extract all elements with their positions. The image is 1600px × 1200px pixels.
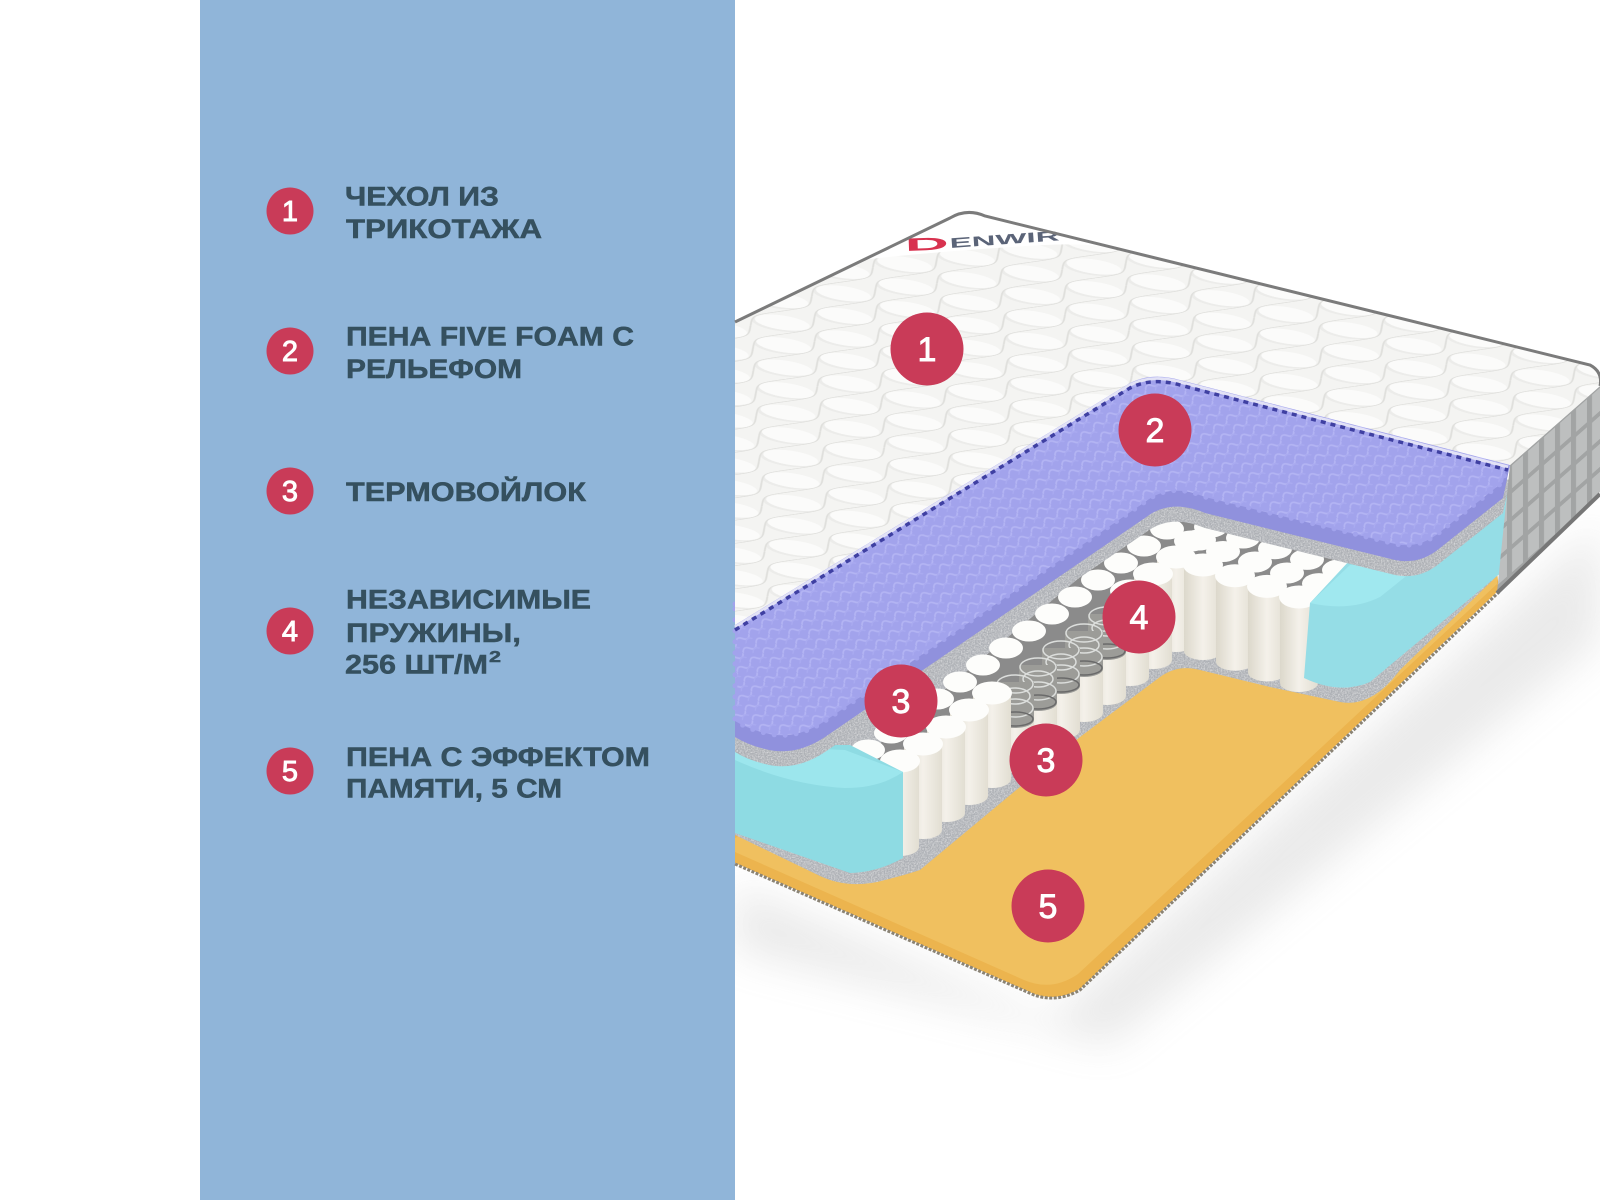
layer: cyan foam block left <box>735 745 903 873</box>
label 4: 256 ШТ/М <box>345 650 488 680</box>
label 2 <box>346 322 634 384</box>
label 4 <box>345 584 591 680</box>
mattress side with grid quilting <box>1497 386 1600 593</box>
callout 5: 5 <box>1039 888 1057 926</box>
badge 1 <box>266 188 314 234</box>
callout 3 upper <box>864 664 938 738</box>
label 4: 2 <box>489 649 501 666</box>
label 4: ПРУЖИНЫ, <box>346 618 521 648</box>
mattress illustration <box>735 212 1600 1045</box>
layer: purple relief foam <box>735 361 1510 751</box>
badge 5 <box>266 748 314 794</box>
label 3: ТЕРМОВОЙЛОК <box>346 477 587 507</box>
cover piping <box>735 212 1600 386</box>
legend item 3: thermal felt <box>266 468 587 514</box>
badge 1: 1 <box>282 196 298 228</box>
badge 4: 4 <box>282 616 298 648</box>
label 5: ПАМЯТИ, 5 СМ <box>346 774 562 804</box>
layer: yellow memory foam <box>735 572 1499 998</box>
label 5 <box>346 742 650 804</box>
label 1 <box>345 182 542 244</box>
badge 3 <box>266 468 314 514</box>
callout 1: 1 <box>918 331 936 369</box>
drop shadow <box>735 525 1600 1045</box>
label 2: РЕЛЬЕФОМ <box>346 354 522 384</box>
callout 4 <box>1102 580 1176 654</box>
label 2: ПЕНА FIVE FOAM С <box>346 322 634 352</box>
callout 2 <box>1118 394 1192 466</box>
callout 3 upper: 3 <box>892 683 910 721</box>
layer: felt floor <box>735 490 1500 884</box>
label 5: ПЕНА С ЭФФЕКТОМ <box>346 742 650 772</box>
callout 3 lower: 3 <box>1037 742 1055 780</box>
legend item 4: pocket springs <box>266 584 591 680</box>
brand label: D <box>904 233 949 255</box>
layer: white knitted cover <box>735 212 1600 630</box>
callout 1 <box>890 312 964 386</box>
panel: blue legend column <box>200 0 735 1200</box>
badge 5: 5 <box>282 756 298 788</box>
legend list <box>266 182 650 804</box>
legend item 2: relief foam <box>266 322 634 384</box>
legend item 5: memory foam <box>266 742 650 804</box>
brand label <box>860 212 1107 260</box>
callout markers on mattress <box>864 312 1192 942</box>
badge 4 <box>266 608 314 654</box>
label 1: ТРИКОТАЖА <box>346 214 542 244</box>
callout 4: 4 <box>1130 599 1148 637</box>
badge 3: 3 <box>282 476 298 508</box>
layer: cyan foam block right <box>1304 490 1512 688</box>
badge 2: 2 <box>282 336 298 368</box>
callout 5 <box>1012 870 1084 942</box>
callout 2: 2 <box>1146 412 1164 450</box>
legend item 1: cover <box>266 182 542 244</box>
badge 2 <box>266 328 314 374</box>
spring cavity background <box>860 505 1430 790</box>
label 1: ЧЕХОЛ ИЗ <box>345 182 499 212</box>
callout 3 lower <box>1010 724 1082 796</box>
label 4: НЕЗАВИСИМЫЕ <box>346 584 591 614</box>
brand label: ENWIR <box>949 227 1060 251</box>
pocket springs block <box>851 504 1376 856</box>
layer: felt band under foam <box>735 392 1510 766</box>
